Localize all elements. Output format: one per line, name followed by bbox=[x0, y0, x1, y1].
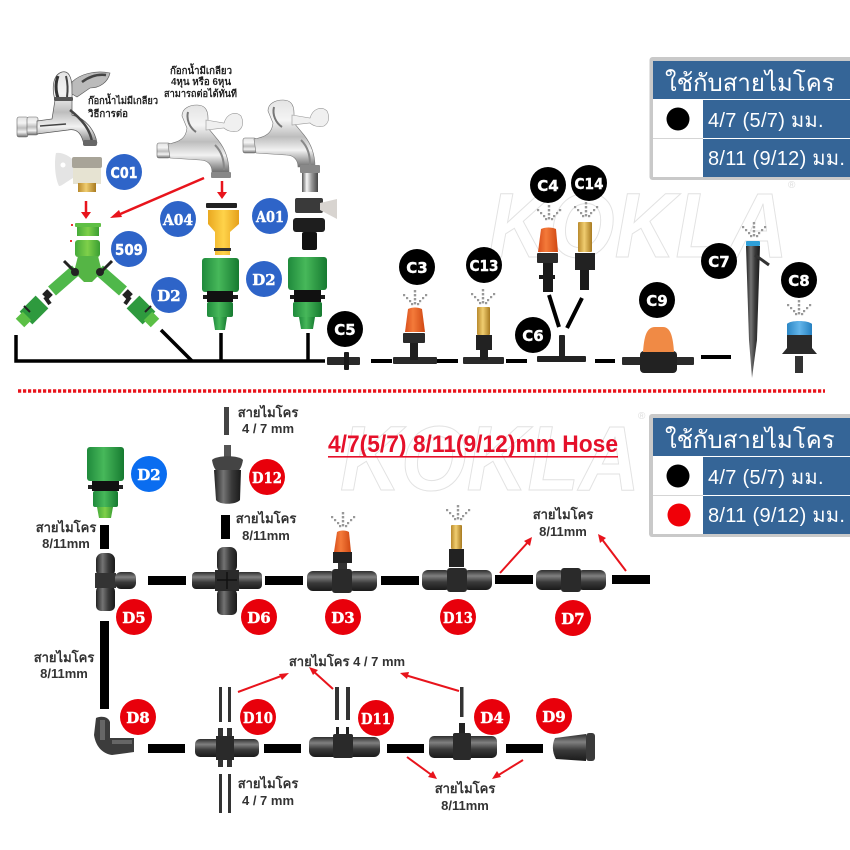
badge: D11: D11 bbox=[361, 710, 391, 728]
badge: D2 lower: D2 bbox=[137, 466, 161, 484]
arrow: C01 to 509 bbox=[81, 201, 91, 219]
hose: C4 and C14 to C6 bbox=[549, 295, 582, 328]
label: hose D7: 8/11mm bbox=[539, 524, 587, 539]
icon: C6 tee bbox=[537, 335, 586, 362]
legend panel: top bbox=[650, 57, 850, 180]
icon: threaded faucet 2 bbox=[243, 100, 329, 192]
icon: A01 black adapter bbox=[293, 198, 337, 250]
icon: D9 end cap bbox=[553, 733, 595, 761]
label: hose below D10 bbox=[238, 775, 298, 808]
icon: C01 adapter bbox=[55, 153, 102, 192]
watermark: KOKLA top: KOKLA bbox=[488, 175, 788, 277]
badge: A01 bbox=[252, 198, 288, 234]
label: hose D2 to D5 bbox=[36, 519, 96, 551]
legend panel: top: 4/7 (5/7) มม. bbox=[708, 110, 824, 132]
badge: C4 bbox=[530, 167, 566, 203]
badge: D2 left: D2 bbox=[157, 287, 181, 305]
hose network: top left bbox=[16, 330, 325, 361]
badge: C01: C01 bbox=[110, 164, 138, 182]
label: hose D5 to D8: 8/11mm bbox=[40, 666, 88, 681]
label: hose 4/7: 4 / 7 mm bbox=[242, 421, 294, 436]
badge: C8 bbox=[781, 262, 817, 298]
label: hose D12 to D6 bbox=[236, 510, 296, 543]
label: hose D12 to D6: สายไมโคร bbox=[236, 510, 296, 526]
icon: 509 Y connector bbox=[45, 223, 130, 297]
arrows: to hose 8/11 label bbox=[407, 757, 523, 779]
label: hose D2 to D5: สายไมโคร bbox=[36, 519, 96, 535]
label: hose below D10: สายไมโคร bbox=[238, 775, 298, 791]
badge: C6 bbox=[515, 317, 551, 353]
badge: D2 left bbox=[151, 277, 187, 313]
legend panel: bottom: ใช้กับสายไมโคร bbox=[665, 426, 835, 454]
icon: D10 cross bbox=[195, 687, 259, 813]
arrows: to hose 4/7 label bbox=[238, 667, 459, 692]
label: hose D5 to D8: สายไมโคร bbox=[34, 649, 94, 665]
icon: D11 twin tee bbox=[309, 687, 380, 758]
icon: D7 straight connector bbox=[536, 568, 606, 592]
badge: D3 bbox=[325, 599, 361, 635]
watermark: KOKLA top: ® bbox=[788, 180, 796, 191]
badge: C3 bbox=[399, 249, 435, 285]
badge: C01 bbox=[106, 154, 142, 190]
hose segments: lower section bbox=[100, 515, 650, 753]
badge: D13: D13 bbox=[443, 609, 473, 627]
badge: A04: A04 bbox=[162, 211, 193, 229]
label: hose 4/7: สายไมโคร bbox=[238, 404, 298, 420]
text: faucet without thread bbox=[88, 93, 158, 120]
text: threaded faucet note bbox=[164, 63, 237, 100]
legend panel: bottom: 8/11 (9/12) มม. bbox=[708, 505, 845, 527]
badge: C4: C4 bbox=[537, 177, 559, 195]
badge: D10: D10 bbox=[243, 709, 273, 727]
badge: C13: C13 bbox=[470, 257, 498, 275]
icon: D6 cross bbox=[192, 547, 262, 615]
icon: D12 end bbox=[212, 445, 243, 504]
label: hose below D10: 4 / 7 mm bbox=[242, 793, 294, 808]
text: threaded faucet note: สามารถต่อได้ทันที bbox=[164, 87, 237, 100]
badge: C9: C9 bbox=[646, 292, 668, 310]
icon: C7 stake bbox=[742, 222, 769, 378]
icon: faucet without thread bbox=[17, 72, 110, 146]
badge: D13 bbox=[440, 599, 476, 635]
badge: C5: C5 bbox=[334, 321, 356, 339]
label: hose D7: สายไมโคร bbox=[533, 506, 593, 522]
icon: C9 valve bbox=[622, 327, 694, 373]
divider: red dotted line bbox=[18, 389, 825, 393]
badge: D10 bbox=[240, 699, 276, 735]
badge: D2 lower bbox=[131, 456, 167, 492]
icon: D3 sprinkler tee bbox=[307, 512, 377, 593]
icon: D13 sprinkler tee bbox=[422, 505, 492, 592]
badge: 509: 509 bbox=[115, 241, 143, 259]
icon: D8 elbow bbox=[94, 717, 134, 755]
badge: A04 bbox=[160, 201, 196, 237]
badge: D7: D7 bbox=[561, 610, 585, 628]
icon: D2 right bbox=[288, 257, 327, 329]
arrow: faucet to A04 bbox=[217, 181, 227, 199]
icon: C3 sprinkler bbox=[393, 290, 437, 364]
badge: C14: C14 bbox=[574, 175, 604, 193]
badge: C13 bbox=[466, 247, 502, 283]
icon: hose 4/7 vertical bbox=[224, 407, 229, 435]
badge: D6: D6 bbox=[247, 609, 271, 627]
text: faucet without thread: ก๊อกน้ำไม่มีเกลียว bbox=[88, 93, 158, 107]
icon: A04 yellow adapter bbox=[206, 203, 239, 255]
badge: C5 bbox=[327, 311, 363, 347]
badge: D7 bbox=[555, 600, 591, 636]
badge: D4: D4 bbox=[480, 709, 504, 727]
icon: D5 tee bbox=[95, 553, 136, 611]
badge: D12 bbox=[249, 459, 285, 495]
badge: C8: C8 bbox=[788, 272, 810, 290]
badge: C14 bbox=[571, 165, 607, 201]
text: threaded faucet note: 4หุน หรือ 6หุน bbox=[171, 76, 231, 88]
icon: C4 sprinkler bbox=[537, 205, 561, 292]
label: hose top of D10 D11 D4: สายไมโคร 4 / 7 mm bbox=[289, 653, 405, 669]
badge: D8 bbox=[120, 699, 156, 735]
icon: C8 dripper bbox=[782, 300, 817, 373]
badge: D6 bbox=[241, 599, 277, 635]
legend panel: top: 8/11 (9/12) มม. bbox=[708, 148, 845, 170]
icon: threaded faucet 1 bbox=[157, 105, 243, 178]
watermark: KOKLA bottom: ® bbox=[638, 411, 646, 422]
label: hose below D4 bbox=[435, 780, 495, 813]
badge: D3: D3 bbox=[331, 609, 355, 627]
hose dashes: top row bbox=[371, 355, 731, 363]
badge: C7: C7 bbox=[708, 253, 730, 271]
watermark: KOKLA bottom: KOKLA bbox=[340, 408, 640, 510]
badge: C7 bbox=[701, 243, 737, 279]
arrow: faucet to 509 bbox=[110, 178, 204, 218]
label: hose below D4: 8/11mm bbox=[441, 798, 489, 813]
label: hose 4/7 bbox=[238, 404, 298, 436]
badge: 509 bbox=[111, 231, 147, 267]
label: hose D12 to D6: 8/11mm bbox=[242, 528, 290, 543]
icon: D2 right of Y bbox=[125, 297, 155, 323]
text: threaded faucet note: ก๊อกน้ำมีเกลียว bbox=[170, 63, 232, 77]
badge: D5: D5 bbox=[122, 609, 146, 627]
badge: A01: A01 bbox=[255, 208, 284, 226]
legend panel: bottom bbox=[649, 414, 850, 537]
icon: C14 sprinkler bbox=[574, 202, 598, 290]
badge: D2 middle: D2 bbox=[252, 271, 276, 289]
icon: C5 connector bbox=[327, 352, 360, 370]
legend panel: top: ใช้กับสายไมโคร bbox=[665, 69, 835, 97]
icon: D2 middle bbox=[202, 258, 239, 330]
badge: D12: D12 bbox=[252, 469, 282, 487]
badge: C3: C3 bbox=[406, 259, 428, 277]
label: hose D2 to D5: 8/11mm bbox=[42, 536, 90, 551]
badge: D8: D8 bbox=[126, 709, 150, 727]
badge: C6: C6 bbox=[522, 327, 544, 345]
badge: D11 bbox=[358, 700, 394, 736]
icon: D2 lower bbox=[87, 447, 124, 518]
badge: D9: D9 bbox=[542, 708, 566, 726]
title: hose sizes: 4/7(5/7) 8/11(9/12)mm Hose bbox=[328, 431, 618, 458]
badge: D4 bbox=[474, 699, 510, 735]
label: hose D5 to D8 bbox=[34, 649, 94, 681]
icon: C13 sprinkler bbox=[463, 289, 504, 364]
badge: C9 bbox=[639, 282, 675, 318]
label: hose D7 bbox=[533, 506, 593, 539]
badge: D9 bbox=[536, 698, 572, 734]
badge: D5 bbox=[116, 599, 152, 635]
label: hose below D4: สายไมโคร bbox=[435, 780, 495, 796]
text: faucet without thread: วิธีการต่อ bbox=[88, 108, 128, 120]
icon: D4 tee bbox=[429, 687, 497, 760]
arrows: D7 hoses bbox=[500, 534, 626, 573]
legend panel: bottom: 4/7 (5/7) มม. bbox=[708, 467, 824, 489]
badge: D2 middle bbox=[246, 261, 282, 297]
icon: D2 left of Y bbox=[20, 297, 50, 323]
